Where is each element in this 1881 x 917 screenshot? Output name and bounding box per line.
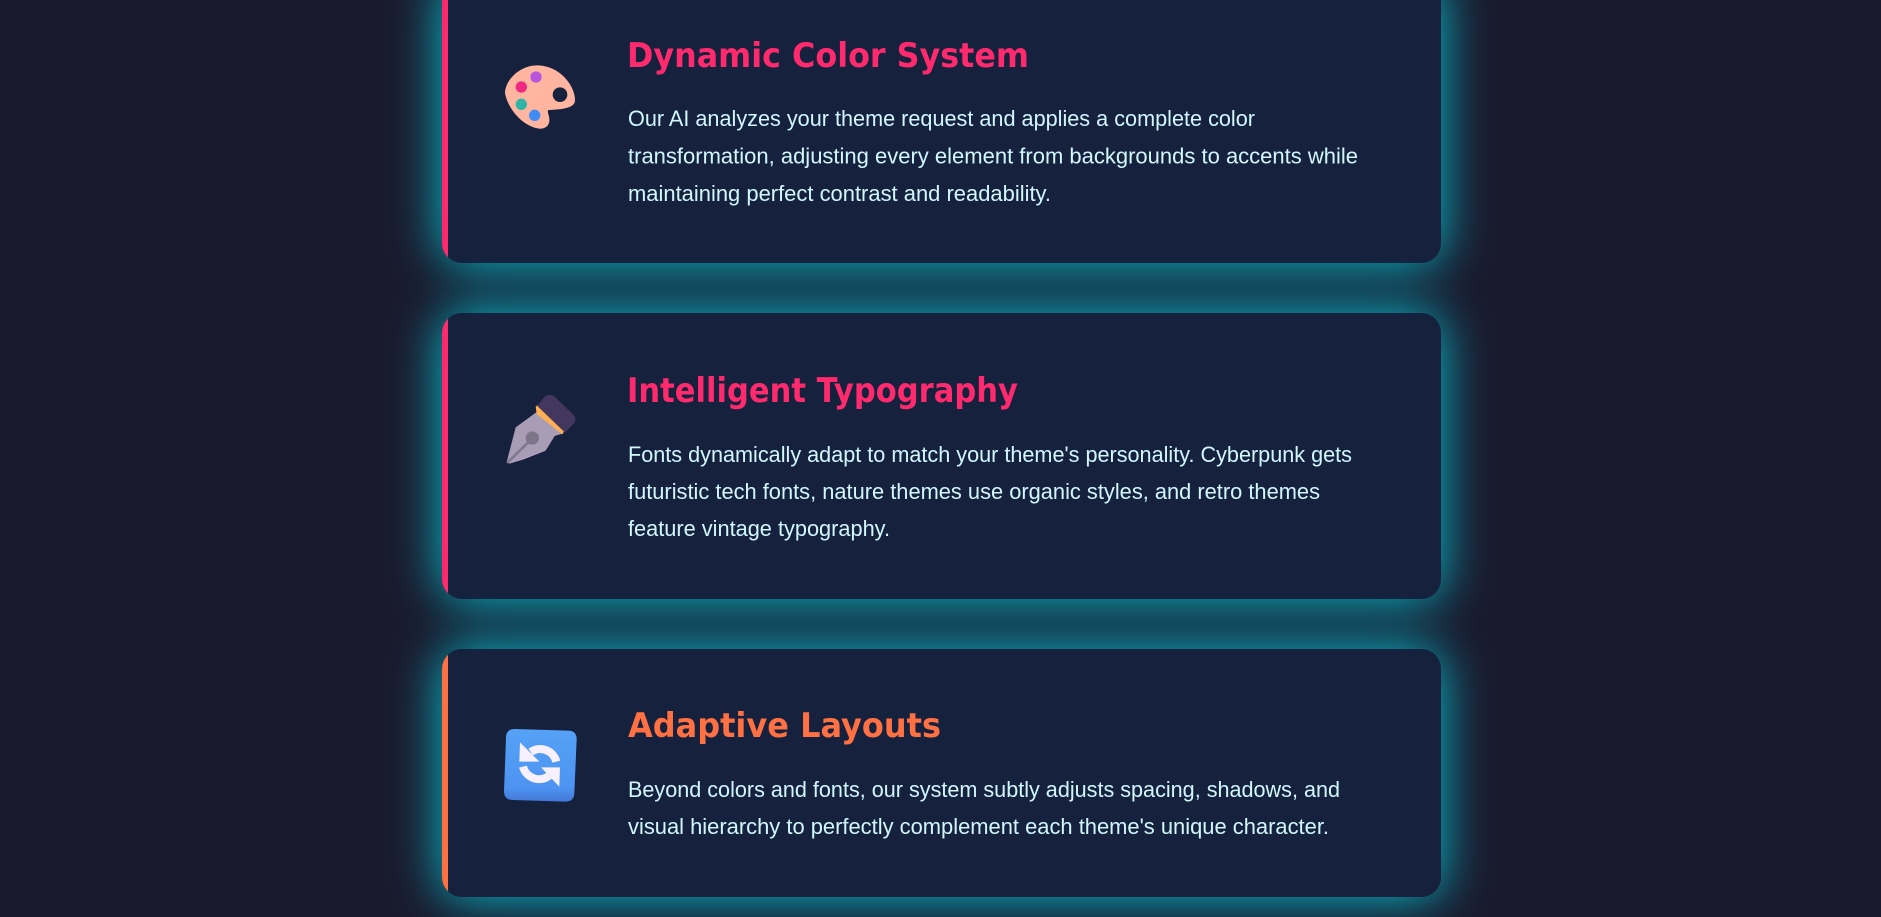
panel: Adaptive Layouts <box>442 649 1441 897</box>
text: Dynamic Color System description: Our AI analyzes your theme request and applies a complete color <box>628 106 1255 131</box>
text: Adaptive Layouts description: visual hierarchy to perfectly complement each theme's unique character. <box>628 814 1329 839</box>
heading: Dynamic Color System: Dynamic Color System <box>627 36 1029 76</box>
icon: fountain pen nib <box>506 394 576 464</box>
text: Intelligent Typography description: futuristic tech fonts, nature themes use organic styles, and retro themes <box>628 479 1320 504</box>
heading: Intelligent Typography: Intelligent Typography <box>627 371 1018 411</box>
text: Dynamic Color System description <box>628 106 1358 206</box>
text: Intelligent Typography description <box>628 442 1352 541</box>
panel: Dynamic Color System <box>442 0 1441 263</box>
icon: blue sync arrows button <box>504 729 577 802</box>
text: Dynamic Color System description: maintaining perfect contrast and readability. <box>628 181 1051 206</box>
heading: Adaptive Layouts: Adaptive Layouts <box>628 706 941 746</box>
text: Dynamic Color System description: transformation, adjusting every element from backgrounds to accents while <box>628 144 1358 168</box>
panel: Intelligent Typography <box>442 313 1441 599</box>
icon: artist palette <box>505 65 575 129</box>
text: Intelligent Typography description: feature vintage typography. <box>628 516 890 541</box>
text: Intelligent Typography description: Fonts dynamically adapt to match your theme's personality. Cyberpunk gets <box>628 442 1352 467</box>
text: Adaptive Layouts description <box>628 777 1340 839</box>
text: Adaptive Layouts description: Beyond colors and fonts, our system subtly adjusts spacing, shadows, and <box>628 777 1340 802</box>
